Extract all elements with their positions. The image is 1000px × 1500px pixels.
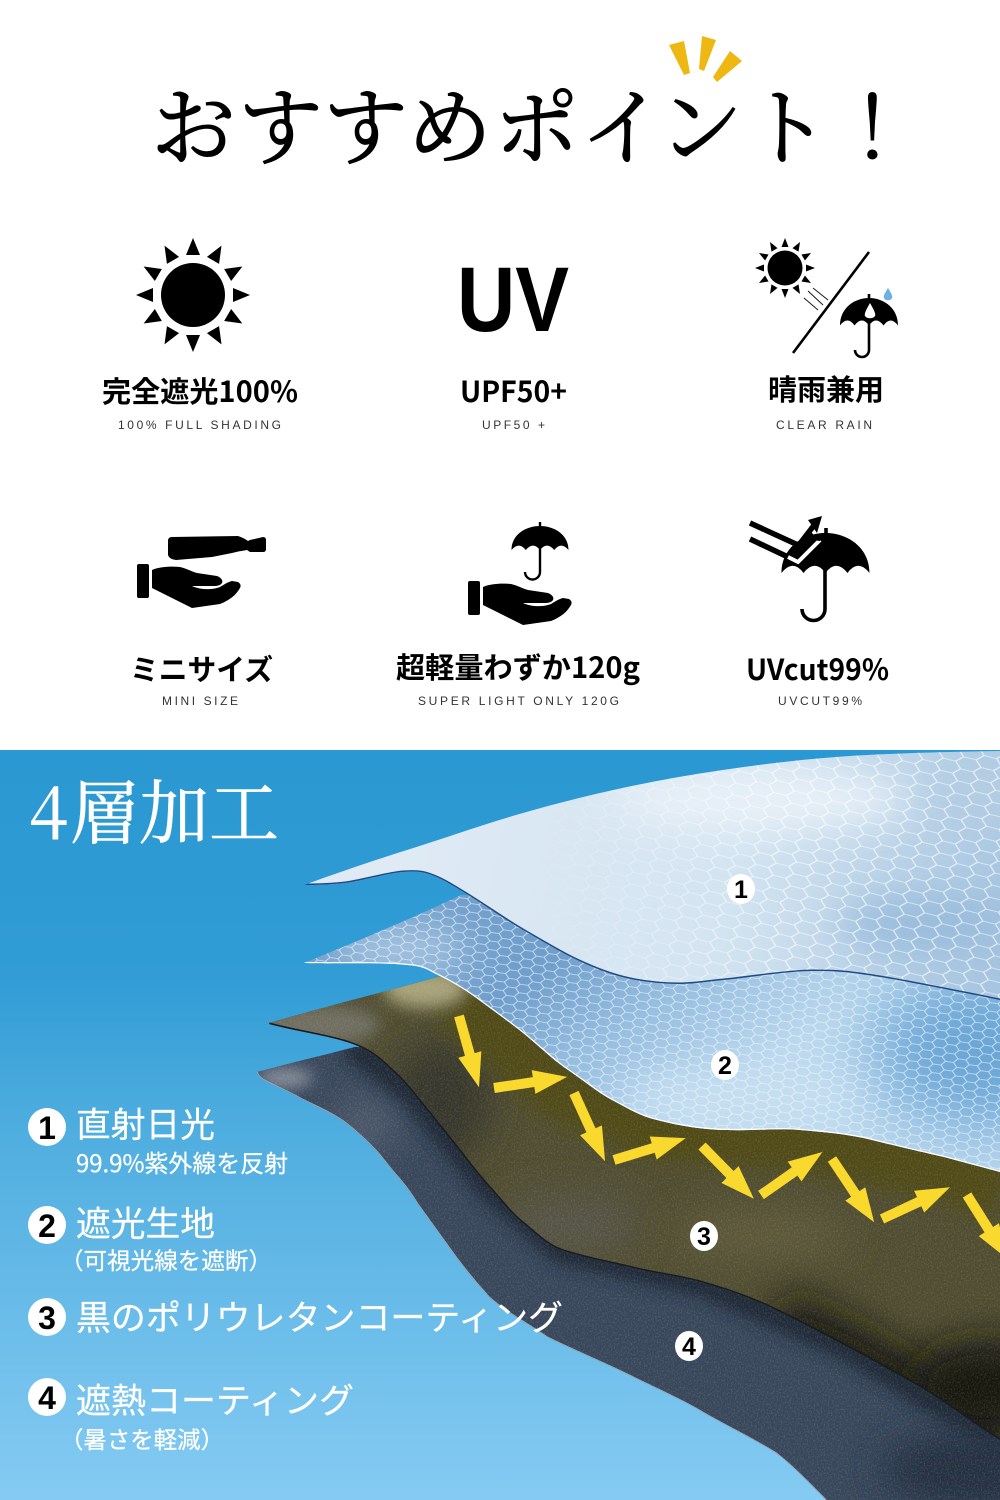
icon: umbrella reflecting rays — [750, 516, 870, 620]
legend 3: 3 — [38, 1300, 56, 1336]
sublabel: UPF50 +: UPF50 + — [482, 418, 545, 432]
legend 2: （可視光線を遮断） — [60, 1242, 272, 1276]
legend 4: 遮熱コーティング — [76, 1373, 354, 1423]
icon: umbrella over hand — [468, 522, 572, 625]
panel: mini size — [130, 536, 273, 708]
layer number markers: 1 — [734, 876, 748, 904]
icon: title sparkle — [669, 36, 742, 82]
legend 1: 直射日光 — [76, 1097, 215, 1147]
layer 1: direct sunlight shell — [300, 750, 1000, 1005]
panel: four layer background — [0, 750, 1000, 1500]
title: おすすめポイント！ — [151, 61, 915, 183]
icon: sun — [136, 238, 250, 352]
layer number markers — [675, 874, 755, 1361]
sublabel: mini size: MINI SIZE — [162, 694, 238, 708]
label: full shading: 完全遮光100% — [102, 369, 298, 411]
legend 2: 遮光生地 — [76, 1196, 215, 1246]
icon: bottle over hand — [137, 536, 266, 608]
legend 4 — [28, 1373, 354, 1455]
sublabel: super light: SUPER LIGHT ONLY 120G — [418, 694, 619, 708]
label: clear and rain: 晴雨兼用 — [768, 367, 884, 409]
legend 2 — [28, 1196, 272, 1276]
panel: clear and rain — [755, 238, 898, 432]
label: super light: 超軽量わずか120g — [396, 645, 640, 687]
icon: sun and umbrella — [755, 238, 898, 357]
icon: UV: UV — [457, 249, 569, 351]
legend 3: 黒のポリウレタンコーティング — [76, 1290, 563, 1340]
legend 4: （暑さを軽減） — [60, 1421, 224, 1455]
legend 1: 1 — [38, 1110, 56, 1146]
sublabel: full shading: 100% FULL SHADING — [118, 418, 281, 432]
layer number markers: 4 — [682, 1333, 696, 1361]
page background — [0, 0, 1000, 750]
sublabel: UV cut: UVCUT99% — [778, 694, 862, 708]
legend 1 — [28, 1097, 288, 1179]
label: UV cut: UVcut99% — [746, 647, 889, 689]
legend 2: 2 — [38, 1208, 56, 1244]
panel: UPF50+ — [457, 249, 569, 432]
layer number markers: 3 — [697, 1223, 711, 1251]
label: mini size: ミニサイズ — [130, 647, 273, 689]
legend 4: 4 — [38, 1380, 56, 1416]
label: UPF50+: UPF50+ — [460, 369, 567, 411]
heading: 4 layers: 4層加工 — [29, 758, 279, 859]
layer 3: black polyurethane coating — [260, 968, 1000, 1450]
sublabel: clear rain: CLEAR RAIN — [776, 418, 872, 432]
panel: UV cut — [746, 516, 889, 708]
panel: full shading — [102, 238, 298, 432]
panel: super light — [396, 522, 640, 708]
layer number markers: 2 — [718, 1052, 732, 1080]
layer 2: light-blocking fabric — [300, 890, 1000, 1180]
yellow reflection arrows — [447, 1013, 1000, 1265]
layer 4: heat-shield coating — [250, 1040, 1000, 1500]
legend 1: 99.9%紫外線を反射 — [76, 1144, 288, 1179]
